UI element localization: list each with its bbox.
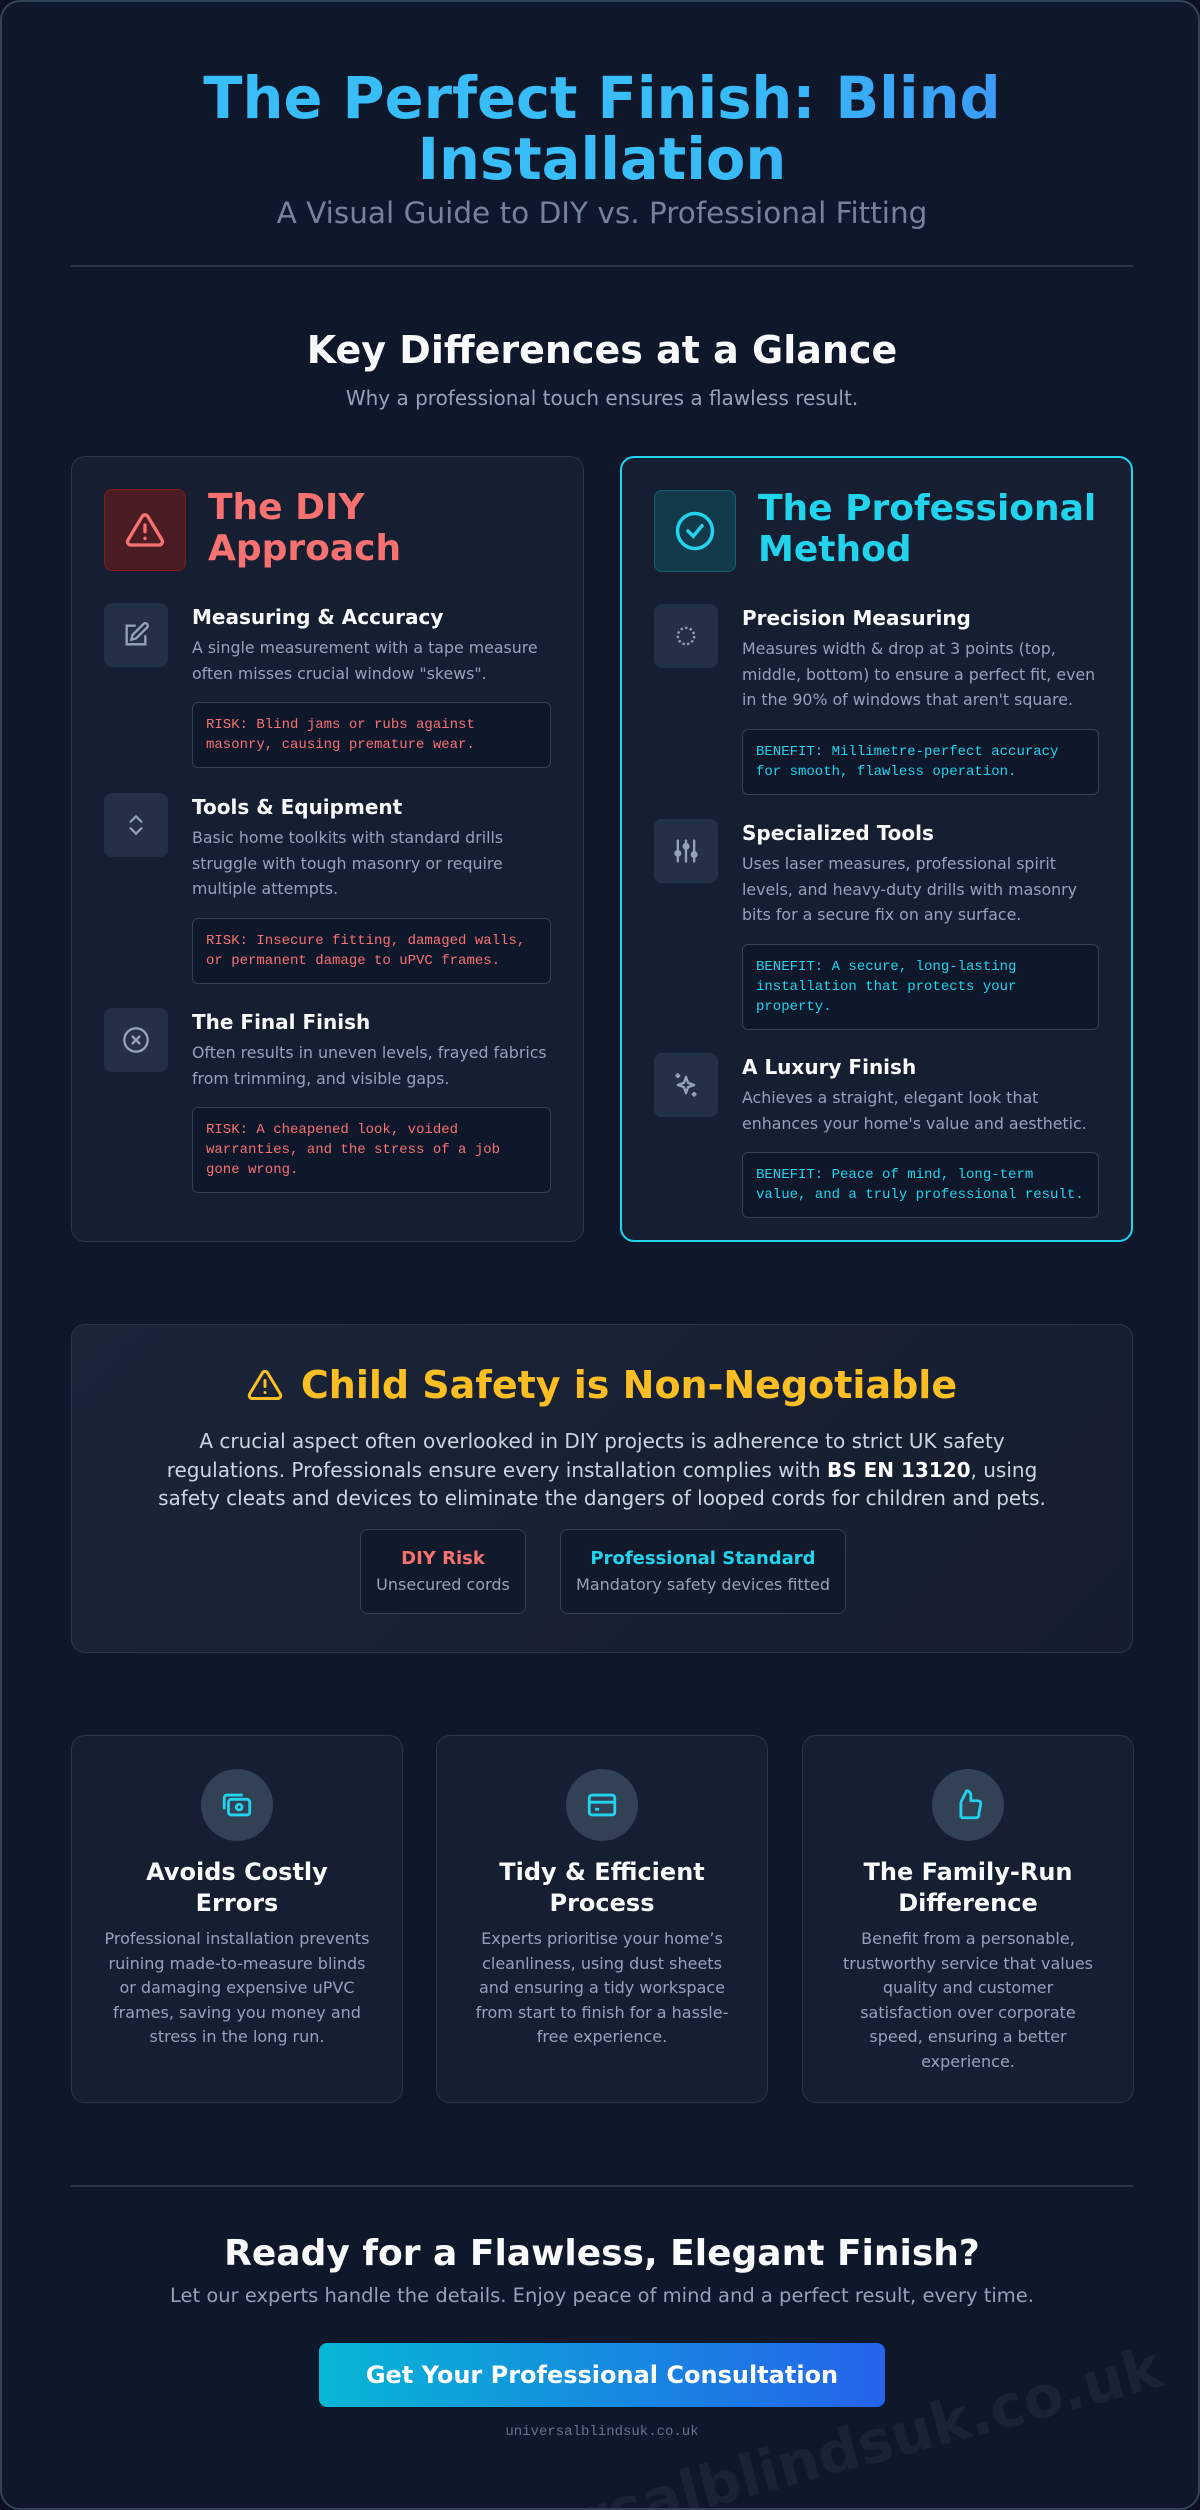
panel: DIY approach: Tools & Equipment xyxy=(192,795,402,819)
professional standard box: Professional Standard xyxy=(590,1548,816,1569)
card: tidy process: free experience. xyxy=(537,2027,667,2046)
item: specialized tools xyxy=(654,819,1099,1030)
card: avoids costly errors: ruining made-to-measure blinds xyxy=(108,1954,365,1972)
panel: professional method: Measures width & drop at 3 points (top, xyxy=(742,639,1056,658)
title: The Perfect Finish: Blind xyxy=(203,65,1001,132)
DIY heading xyxy=(208,487,401,569)
item: luxury finish xyxy=(654,1053,1099,1218)
card: tidy process: cleanliness, using dust sheets xyxy=(482,1954,722,1972)
DIY heading: Approach xyxy=(208,528,401,569)
panel: DIY approach: Measuring & Accuracy xyxy=(192,605,443,629)
card: tidy process: and ensuring a tidy workspace xyxy=(479,1978,725,1997)
panel: professional method: Precision Measuring xyxy=(742,606,971,630)
panel: professional method: in the 90% of windows that aren't square. xyxy=(742,690,1073,709)
panel: professional method: Uses laser measures, professional spirit xyxy=(742,854,1056,873)
professional standard box: Mandatory safety devices fitted xyxy=(576,1575,830,1594)
footer url: universalblindsuk.co.uk xyxy=(505,2424,699,2440)
panel: professional method: Achieves a straight, elegant look that xyxy=(742,1088,1038,1107)
professional standard box xyxy=(560,1529,846,1614)
panel: DIY approach: RISK: Insecure fitting, damaged walls, or permanent damage to uPVC frames. xyxy=(206,932,525,968)
panel: DIY approach: The Final Finish xyxy=(192,1010,370,1034)
icon: check xyxy=(654,490,736,572)
panel: professional method: BENEFIT: Peace of mind, long-term value, and a truly professional result. xyxy=(756,1167,1084,1203)
card: avoids costly errors xyxy=(71,1735,403,2103)
panel: DIY approach: Basic home toolkits with standard drills xyxy=(192,828,503,847)
panel: DIY approach: A single measurement with a tape measure xyxy=(192,638,538,657)
card: tidy process xyxy=(436,1735,768,2103)
DIY heading: The DIY xyxy=(208,487,364,528)
CTA button: Get Your Professional Consultation xyxy=(366,2361,838,2389)
item: final finish xyxy=(104,1008,551,1193)
item: measuring xyxy=(104,603,551,768)
card: family-run: speed, ensuring a better xyxy=(869,2027,1067,2046)
panel: professional method: levels, and heavy-duty drills with masonry xyxy=(742,880,1077,898)
panel: DIY approach: Often results in uneven levels, frayed fabrics xyxy=(192,1043,547,1062)
panel: professional method: middle, bottom) to ensure a perfect fit, even xyxy=(742,664,1095,684)
DIY risk box: DIY Risk xyxy=(401,1548,485,1569)
card: family-run: The Family-Run Difference xyxy=(864,1858,1072,1917)
card: family-run: satisfaction over corporate xyxy=(860,2002,1076,2022)
child safety heading: Child Safety is Non-Negotiable xyxy=(301,1363,957,1407)
panel: professional method xyxy=(620,456,1133,1242)
panel: DIY approach: from trimming, and visible gaps. xyxy=(192,1068,449,1088)
card: family-run: trustworthy service that values xyxy=(843,1954,1093,1972)
pro heading: Method xyxy=(758,529,912,570)
panel: DIY approach: RISK: Blind jams or rubs against masonry, causing premature wear. xyxy=(206,717,475,753)
panel: professional method: BENEFIT: A secure, long-lasting installation that protects your property. xyxy=(756,958,1016,1014)
panel: DIY approach: multiple attempts. xyxy=(192,879,338,898)
card: avoids costly errors: Avoids Costly Errors xyxy=(146,1858,328,1917)
subtitle: A Visual Guide to DIY vs. Professional Fitting xyxy=(277,196,927,230)
card: family-run: Benefit from a personable, xyxy=(861,1929,1075,1948)
icon: warning xyxy=(104,489,186,571)
comparison boxes xyxy=(360,1529,846,1614)
CTA heading: Ready for a Flawless, Elegant Finish? xyxy=(224,2233,980,2274)
pro heading xyxy=(758,488,1096,570)
panel: professional method: enhances your home's value and aesthetic. xyxy=(742,1114,1087,1132)
CTA button xyxy=(319,2343,885,2407)
card: avoids costly errors: frames, saving you money and xyxy=(113,2002,361,2022)
card: tidy process: Tidy & Efficient Process xyxy=(499,1858,705,1917)
title xyxy=(203,65,1001,193)
pro heading: The Professional xyxy=(758,488,1096,529)
card: tidy process: from start to finish for a hassle- xyxy=(476,2002,728,2022)
DIY risk box: Unsecured cords xyxy=(376,1575,510,1594)
panel: professional method: bits for a secure fix on any surface. xyxy=(742,905,1021,924)
panel: DIY approach: struggle with tough masonry or require xyxy=(192,854,503,872)
panel: professional method: Specialized Tools xyxy=(742,821,934,845)
card: avoids costly errors: or damaging expensive uPVC xyxy=(119,1978,355,1997)
card: family-run: quality and customer xyxy=(883,1978,1053,1997)
panel: DIY approach: often misses crucial window "skews". xyxy=(192,664,487,682)
panel: child safety xyxy=(71,1324,1133,1653)
card: avoids costly errors: Professional installation prevents xyxy=(105,1929,369,1948)
section heading: Why a professional touch ensures a flawless result. xyxy=(346,386,858,410)
card: family-run xyxy=(802,1735,1134,2103)
card: family-run: experience. xyxy=(921,2052,1015,2070)
section heading: Key Differences at a Glance xyxy=(307,328,897,372)
item: tools xyxy=(104,793,551,984)
item: precision measuring xyxy=(654,604,1099,795)
panel: professional method: BENEFIT: Millimetre-perfect accuracy for smooth, flawless operation. xyxy=(756,744,1058,780)
title: Installation xyxy=(418,126,786,193)
card: tidy process: Experts prioritise your home’s xyxy=(481,1929,723,1948)
safety text: A crucial aspect often overlooked in DIY projects is adherence to strict UK safety regulations. Professionals ensure every installation complies with BS EN 13120, using safety cleats and devices to eliminate the dangers of looped cords for children and pets. xyxy=(158,1429,1046,1510)
section heading xyxy=(307,328,897,410)
panel: professional method: A Luxury Finish xyxy=(742,1055,916,1079)
panel: DIY approach xyxy=(71,456,584,1242)
DIY risk box xyxy=(360,1529,526,1614)
CTA subtext: Let our experts handle the details. Enjoy peace of mind and a perfect result, every time. xyxy=(170,2284,1034,2307)
card: avoids costly errors: stress in the long run. xyxy=(149,2027,324,2046)
panel: DIY approach: RISK: A cheapened look, voided warranties, and the stress of a job gone wrong. xyxy=(206,1122,500,1178)
